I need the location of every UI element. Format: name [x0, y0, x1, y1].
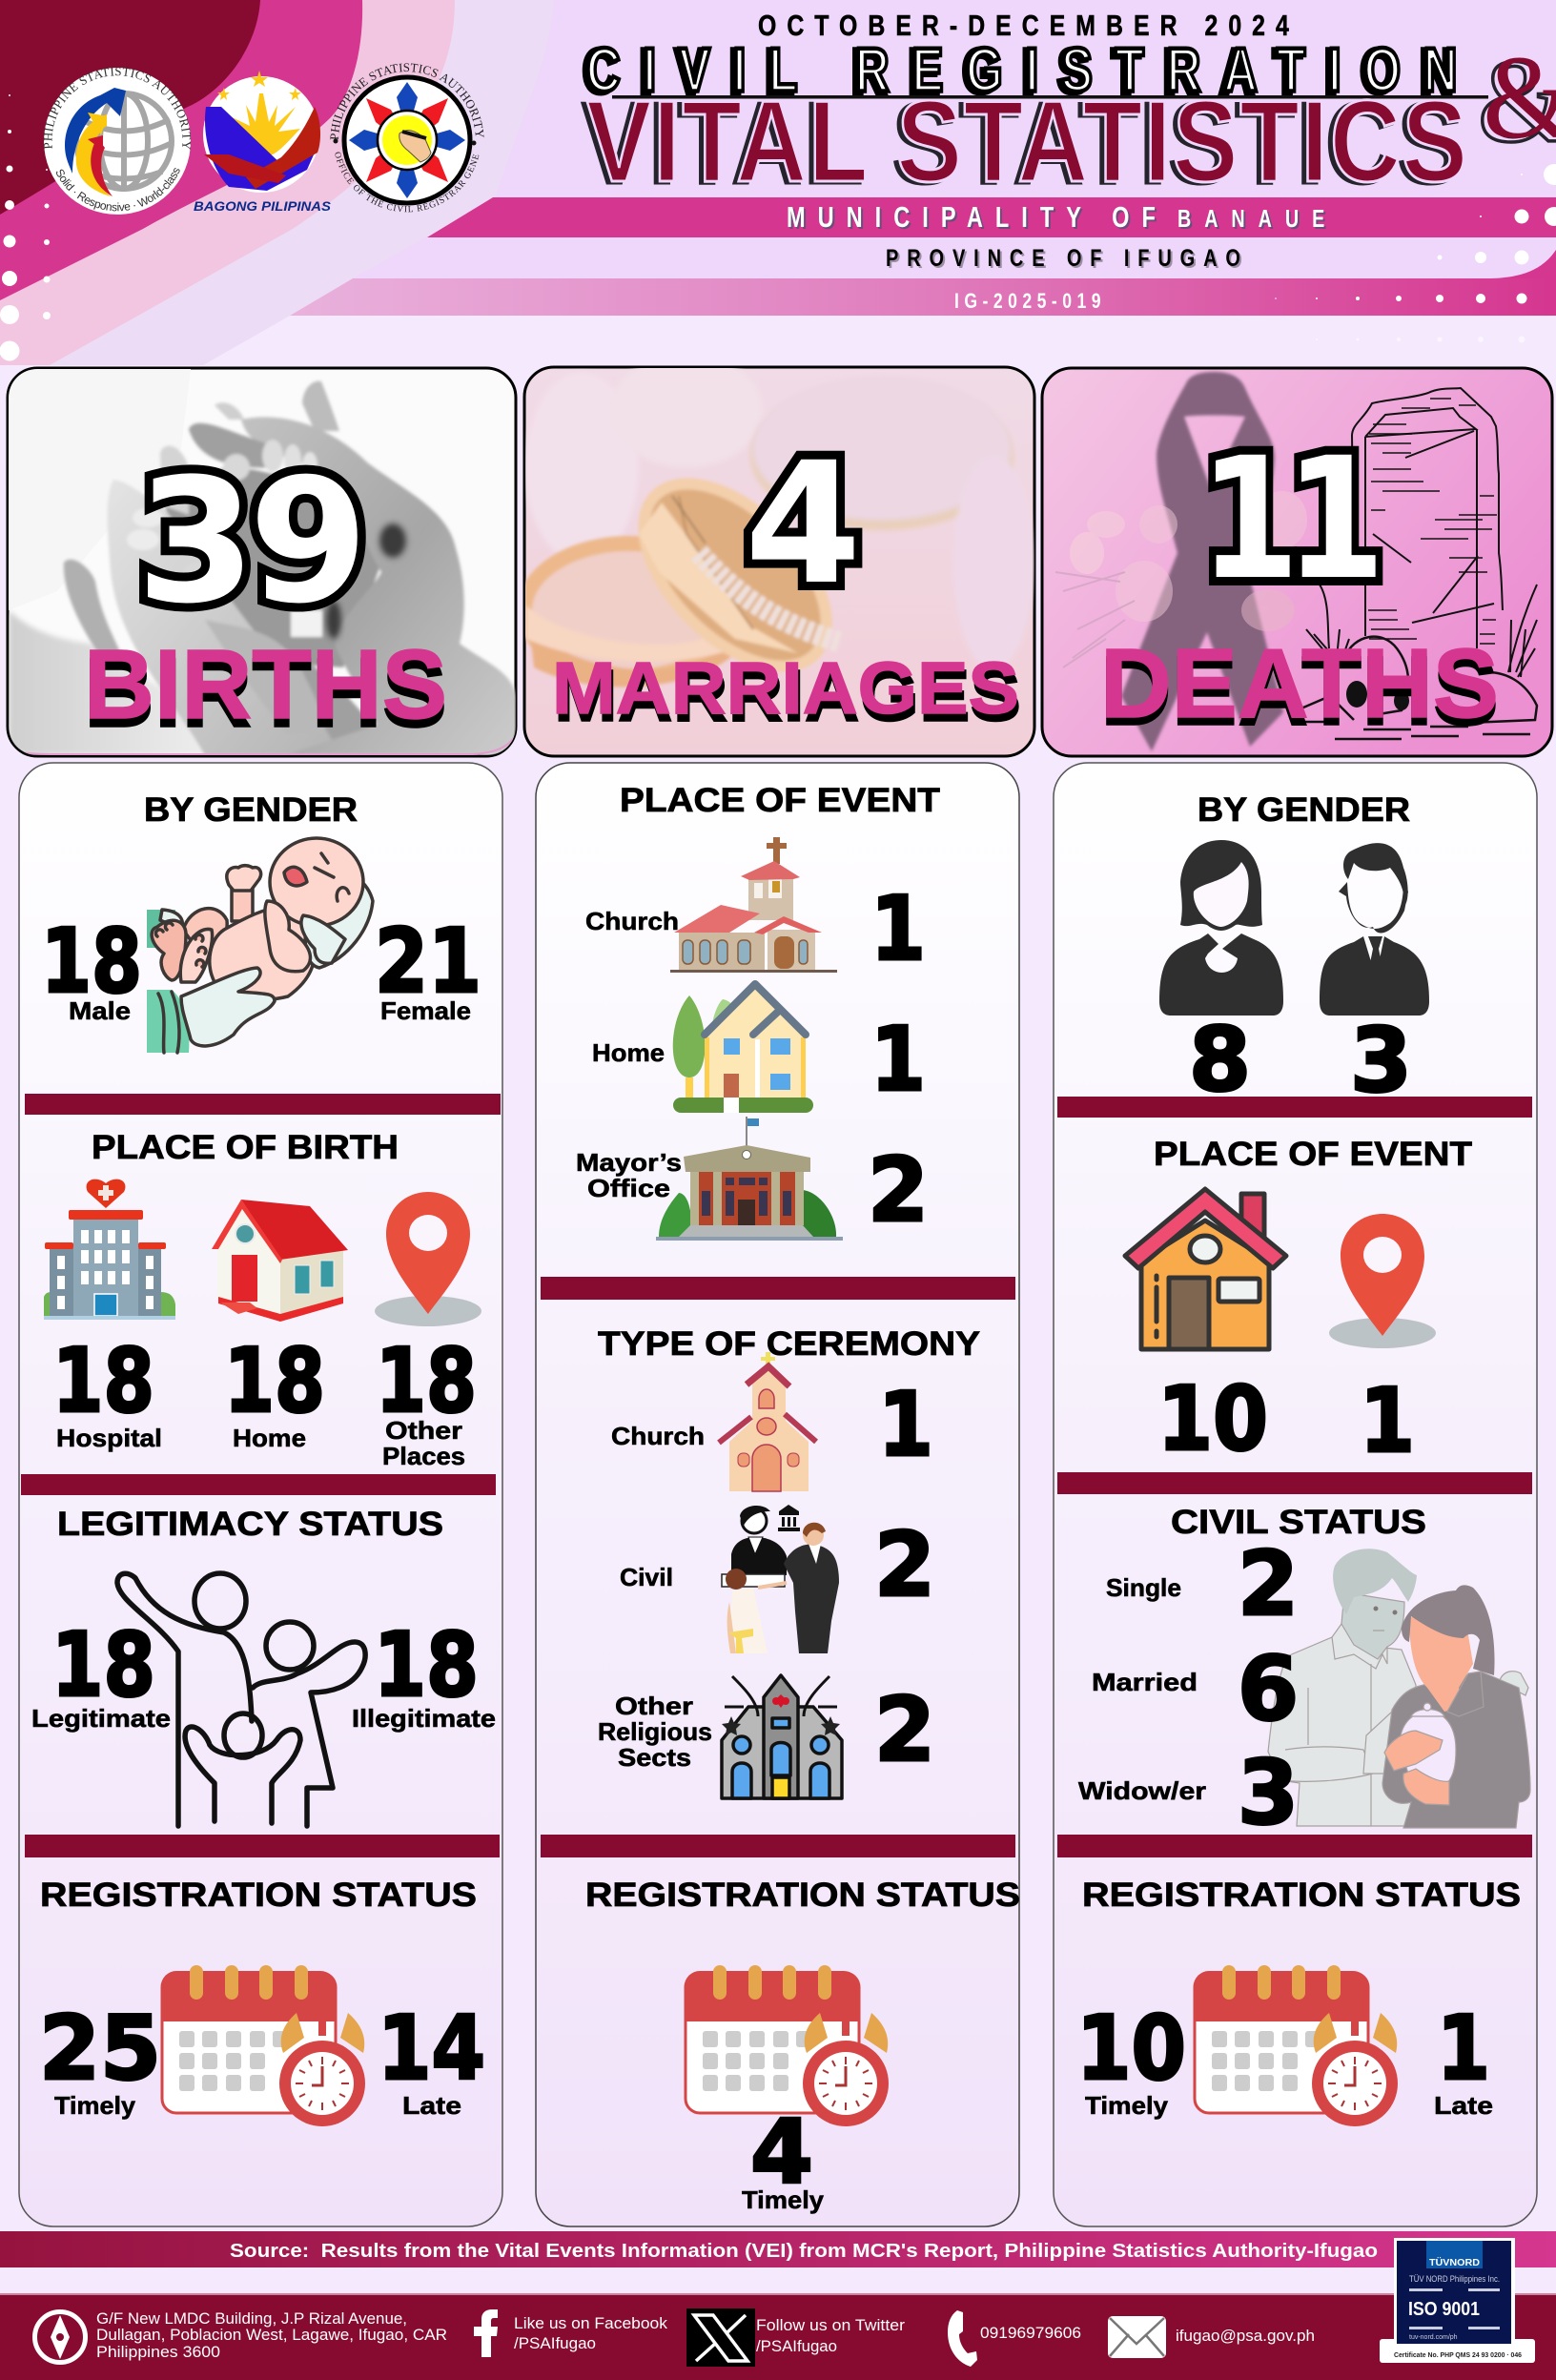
stat: church ceremony count: 1 [878, 1373, 933, 1476]
stat: married: Married [1092, 1668, 1198, 1696]
stat: single [1106, 1532, 1299, 1635]
icon: facebook [474, 2309, 498, 2357]
address: Dullagan, Poblacion West, Lagawe, Ifugao, CAR [96, 2326, 447, 2344]
label: other religious sects: Sects [618, 1743, 691, 1772]
province: PROVINCE OF IFUGAO [886, 245, 1240, 272]
date heading: OCTOBER-DECEMBER 2024 [758, 9, 1289, 42]
heading: legitimacy status: LEGITIMACY STATUS [57, 1506, 443, 1543]
title line 1: CIVIL REGISTRATION [586, 36, 1458, 105]
word: deaths: DEATHS [1100, 636, 1499, 746]
municipality [787, 200, 1326, 236]
illustration: tombstone [1297, 388, 1537, 739]
municipality: MUNICIPALITY OF [788, 202, 1157, 236]
twitter text [756, 2316, 905, 2355]
twitter text: /PSAIfugao [756, 2337, 837, 2355]
stat: male deaths: 3 [1350, 1009, 1412, 1112]
label: other religious sects: Religious [598, 1717, 712, 1746]
icon: woman [1159, 840, 1283, 1016]
number: 39 births [136, 442, 368, 642]
badge: ISO 9001 certification: tuv-nord.com/ph [1409, 2334, 1458, 2341]
icon: X logo [686, 2308, 755, 2367]
icon: location pin [375, 1192, 481, 1326]
icon: location pin [1329, 1214, 1436, 1348]
province: PROVINCE OF IFUGAO [888, 247, 1242, 274]
word: marriages: MARRIAGES [554, 655, 1021, 737]
icon: family outline [117, 1573, 365, 1826]
badge: ISO 9001 certification: TÜV NORD Philippines Inc. [1409, 2274, 1500, 2284]
heading: by gender: BY GENDER [1198, 791, 1410, 829]
municipality: MUNICIPALITY OF [787, 200, 1156, 234]
photo: wedding rings [524, 353, 1034, 699]
municipality: BANAUE [1177, 204, 1324, 233]
stat: other places: 18 [376, 1329, 477, 1432]
illustration: flowers [1055, 491, 1307, 667]
stat: civil count: 2 [874, 1513, 935, 1616]
stat: widow/er: Widow/er [1078, 1776, 1206, 1805]
address [96, 2309, 447, 2361]
twitter text: Follow us on Twitter [756, 2316, 905, 2334]
stat: timely [742, 2101, 825, 2214]
stat: timely: 25 [39, 1997, 161, 2100]
stat: late: Late [402, 2091, 461, 2120]
stat: home: 18 [224, 1329, 325, 1432]
stat: female deaths: 8 [1189, 1008, 1251, 1111]
icon: compass [34, 2311, 86, 2363]
stat: home deaths: 10 [1157, 1367, 1268, 1470]
stat: male: 18 [41, 910, 142, 1013]
number: 4 marriages: 4 [745, 426, 861, 622]
word: marriages: MARRIAGES [552, 647, 1019, 729]
panel: deaths hero [1042, 368, 1552, 756]
label: other religious sects: Other [615, 1692, 693, 1720]
stat: widow/er: 3 [1238, 1741, 1299, 1844]
logo: Philippine Statistics Authority [44, 67, 191, 215]
label: church ceremony: Church [611, 1422, 705, 1450]
heading: place of event: PLACE OF EVENT [620, 782, 940, 819]
facebook text: /PSAIfugao [514, 2334, 596, 2352]
badge: ISO 9001 certification: ISO 9001 [1408, 2299, 1480, 2320]
title line 2: VITAL STATISTICS [586, 76, 1467, 206]
stat: other place deaths: 1 [1360, 1369, 1415, 1472]
heading: registration status: REGISTRATION STATUS [585, 1877, 1020, 1914]
icon: orange house [1125, 1189, 1286, 1349]
stat: legitimate: Legitimate [31, 1704, 171, 1733]
facebook text: Like us on Facebook [514, 2314, 667, 2332]
stat: mayor's office count: 2 [868, 1139, 929, 1241]
header background shapes [0, 0, 1556, 365]
title line 1: CIVIL REGISTRATION [583, 38, 1454, 107]
email: ifugao@psa.gov.ph [1176, 2327, 1315, 2345]
logo: Office of the Civil Registrar General [330, 63, 484, 212]
heading: registration status: REGISTRATION STATUS [1082, 1877, 1521, 1914]
stat: single: Single [1106, 1573, 1181, 1602]
icon: calendar and clock [1194, 1965, 1398, 2126]
badge: ISO 9001 certification: TÜVNORD [1429, 2256, 1480, 2268]
stat: other religious sects count: 2 [874, 1678, 935, 1781]
icon: civil wedding [722, 1505, 839, 1653]
number: 11 deaths: 1 [1199, 421, 1300, 617]
icon: phone [948, 2310, 977, 2367]
heading: registration status: REGISTRATION STATUS [40, 1877, 477, 1914]
icon: envelope [1108, 2316, 1166, 2358]
stat: female: Female [380, 996, 471, 1025]
panel: marriages hero [524, 353, 1034, 756]
stat: single: 2 [1238, 1532, 1299, 1635]
photo: adult and baby hands [9, 369, 516, 755]
stat: timely: Timely [742, 2185, 825, 2214]
icon: calendar and clock [685, 1965, 889, 2126]
stat: other places [376, 1329, 477, 1470]
stat: legitimate: 18 [51, 1613, 155, 1716]
stat: timely: 4 [750, 2101, 813, 2204]
stat: married [1092, 1637, 1299, 1740]
stat: late: Late [1434, 2091, 1493, 2120]
label: mayor's office: Mayor’s [576, 1148, 682, 1177]
address: Philippines 3600 [96, 2343, 220, 2361]
icon: red roof house [212, 1200, 348, 1322]
logo: Philippine Statistics Authority: Solid · Responsive · World-class [56, 168, 179, 212]
word: births: BIRTHS [84, 629, 447, 739]
panel: births hero [8, 368, 516, 756]
icon: church [670, 837, 837, 973]
wordmark: Bagong Pilipinas: BAGONG PILIPINAS [194, 198, 332, 214]
heading: place of birth: PLACE OF BIRTH [92, 1129, 399, 1166]
heading: place of event: PLACE OF EVENT [1154, 1136, 1472, 1173]
icon: man [1320, 843, 1429, 1016]
phone number: 09196979606 [980, 2324, 1081, 2342]
logo: Philippine Statistics Authority: PHILIPPINE STATISTICS AUTHORITY [44, 67, 191, 150]
stat: male: Male [69, 996, 131, 1025]
stat: timely: 10 [1076, 1997, 1186, 2100]
source text: Source: Results from the Vital Events Information (VEI) from MCR's Report, Philippine Statistics Authority-Ifugao [230, 2241, 1378, 2262]
stat: other places: Other [385, 1416, 462, 1445]
label: home: Home [592, 1038, 665, 1067]
number: 11 deaths: 1 [1285, 421, 1385, 617]
logo: Bagong Pilipinas [194, 71, 332, 214]
logo: Office of the Civil Registrar General: PHILIPPINE STATISTICS AUTHORITY [330, 63, 484, 140]
stat: timely: Timely [1085, 2091, 1169, 2120]
source band [0, 2231, 1556, 2267]
stat: timely: Timely [54, 2091, 136, 2120]
icon: hospital [44, 1180, 175, 1320]
footer [0, 2293, 1556, 2380]
illustration: grieving couple [1268, 1549, 1530, 1828]
label: mayor's office [576, 1148, 682, 1202]
panel: births details [19, 763, 502, 2226]
number: 39 births: 3 [136, 442, 256, 642]
number: 39 births: 9 [249, 442, 368, 642]
stat: married: 6 [1238, 1637, 1299, 1740]
stat: late: 1 [1437, 1997, 1490, 2100]
illustration: awareness ribbon [1121, 372, 1283, 751]
icon: town hall [656, 1117, 843, 1241]
badge: ISO 9001 certification: Certificate No. PHP QMS 24 93 0200 · 046 [1394, 2350, 1522, 2359]
stat: other places: Places [382, 1442, 465, 1470]
heading: by gender: BY GENDER [144, 791, 358, 829]
stat: hospital: 18 [52, 1329, 154, 1432]
stat: hospital: Hospital [56, 1424, 162, 1452]
title line 2: VITAL STATISTICS [582, 78, 1463, 208]
word: births: BIRTHS [84, 638, 447, 748]
icon: newborn baby [147, 838, 373, 1053]
facebook text [514, 2314, 667, 2352]
icon: cathedral [722, 1675, 842, 1798]
icon: calendar and clock [161, 1965, 365, 2126]
stat: late: 14 [378, 1997, 485, 2100]
stat: female: 21 [375, 910, 481, 1013]
icon: small church [719, 1352, 816, 1491]
reference number: IG-2025-019 [954, 290, 1101, 314]
stat: illegitimate: 18 [374, 1613, 479, 1716]
panel: marriages details [536, 763, 1020, 2226]
stat: home: Home [233, 1424, 306, 1452]
heading: civil status: CIVIL STATUS [1171, 1504, 1426, 1541]
label: other religious sects [598, 1692, 712, 1772]
label: civil: Civil [620, 1563, 673, 1591]
stat: illegitimate: Illegitimate [352, 1704, 496, 1733]
icon: home with trees [673, 984, 813, 1113]
divider [25, 1094, 501, 1115]
panel: deaths details [1054, 763, 1537, 2226]
header titles [582, 9, 1556, 314]
stat: widow/er [1078, 1741, 1299, 1844]
label: mayor's office: Office [587, 1174, 670, 1202]
stat: home count: 1 [870, 1008, 926, 1111]
stat: church count: 1 [870, 877, 926, 980]
label: church: Church [585, 907, 679, 935]
number: 11 deaths [1199, 421, 1385, 617]
address: G/F New LMDC Building, J.P Rizal Avenue, [96, 2309, 407, 2328]
municipality: BANAUE [1179, 206, 1326, 235]
word: deaths: DEATHS [1100, 628, 1499, 738]
heading: type of ceremony: TYPE OF CEREMONY [598, 1325, 980, 1363]
badge: ISO 9001 certification [1380, 2238, 1535, 2363]
